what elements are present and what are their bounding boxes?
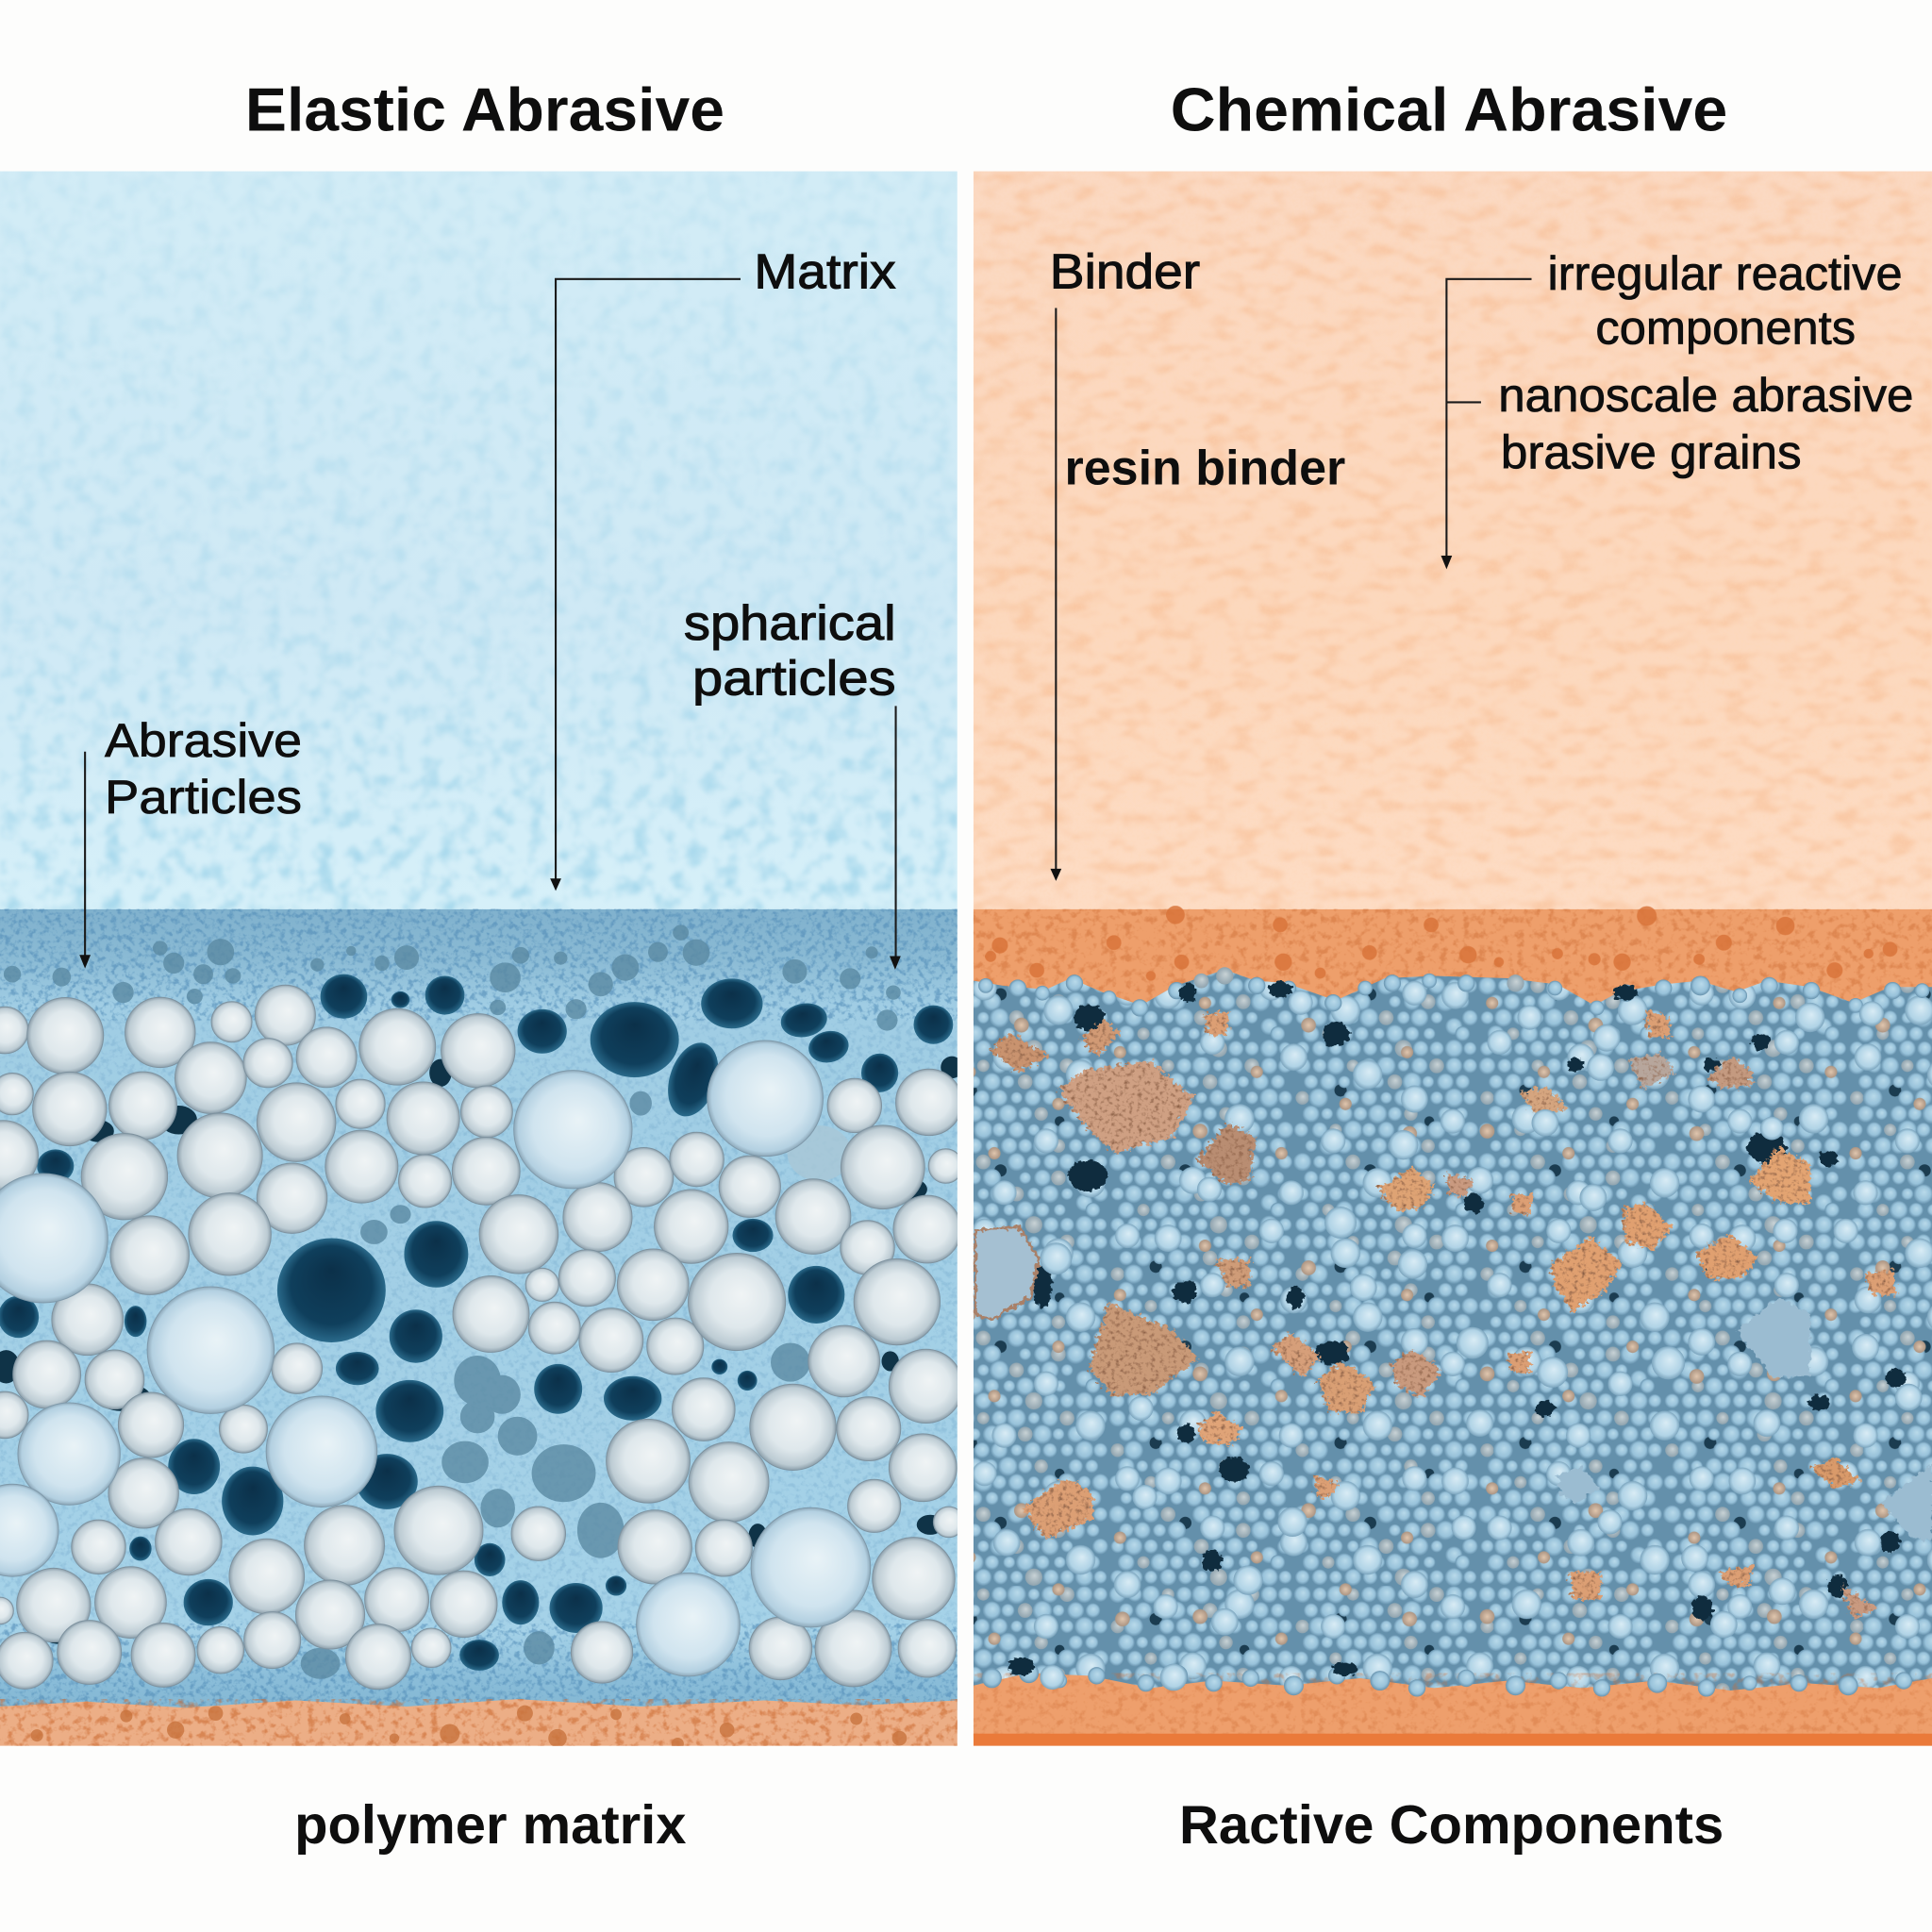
arrow: matrix leader	[550, 279, 741, 891]
irregular reactive rocks: blue-grey	[975, 1226, 1932, 1541]
blue nanoscale grain field	[974, 970, 1932, 1694]
arrow: reactive components bracket leader	[1441, 279, 1532, 569]
label: resin binder: resin binder	[1064, 441, 1345, 495]
label: spherical particles: spharical	[684, 596, 896, 651]
orange pits in binder band	[985, 906, 1897, 981]
irregular reactive rocks: tan	[991, 1009, 1896, 1619]
dark gaps between grains	[1008, 982, 1907, 1675]
label: binder: Binder	[1050, 245, 1200, 300]
porous blue matrix layer	[0, 909, 958, 1710]
label: irregular reactive components	[1547, 247, 1903, 354]
label: irregular reactive components: irregular reactive	[1547, 247, 1903, 300]
label: spherical particles	[684, 596, 896, 707]
label: abrasive particles	[105, 714, 302, 824]
arrow: spherical particles leader	[890, 706, 901, 970]
label: nanoscale abrasive grains	[1498, 369, 1913, 478]
panel: chemical abrasive	[974, 172, 1932, 1746]
label: irregular reactive components: components	[1595, 301, 1856, 354]
pores and spheres	[0, 924, 964, 1750]
arrow: binder leader	[1050, 308, 1061, 881]
dark crevices behind spheres	[0, 1057, 963, 1644]
pale upper binder region	[974, 172, 1932, 910]
larger pale grains	[1040, 991, 1923, 1690]
title: elastic abrasive: Elastic Abrasive	[245, 75, 724, 143]
pale upper matrix region	[0, 172, 958, 910]
orange spots in base layer	[31, 1706, 907, 1750]
caption: reactive components: Ractive Components	[1179, 1795, 1724, 1856]
title: chemical abrasive: Chemical Abrasive	[1171, 75, 1727, 143]
scattered grains and rocks	[975, 906, 1932, 1690]
label: matrix: Matrix	[754, 245, 896, 300]
label: spherical particles: particles	[692, 652, 896, 707]
orange lower binder layer	[974, 1674, 1932, 1746]
label: nanoscale abrasive grains: brasive grains	[1501, 425, 1802, 478]
grains along the band edges	[978, 967, 1929, 1697]
caption: polymer matrix: polymer matrix	[294, 1795, 687, 1856]
label: abrasive particles: Abrasive	[105, 714, 302, 767]
dark pores	[0, 974, 953, 1671]
orange base layer	[0, 1699, 958, 1746]
large pale-blue spheres	[0, 1041, 871, 1676]
orange binder band	[974, 909, 1932, 1020]
label: abrasive particles: Particles	[105, 771, 302, 824]
label: nanoscale abrasive grains: nanoscale abrasive	[1498, 369, 1913, 422]
arrow: abrasive particles leader	[79, 752, 91, 969]
panel: elastic abrasive	[0, 172, 964, 1750]
soft grey-blue blurred pores	[4, 924, 901, 1679]
small white spheres	[0, 985, 964, 1690]
